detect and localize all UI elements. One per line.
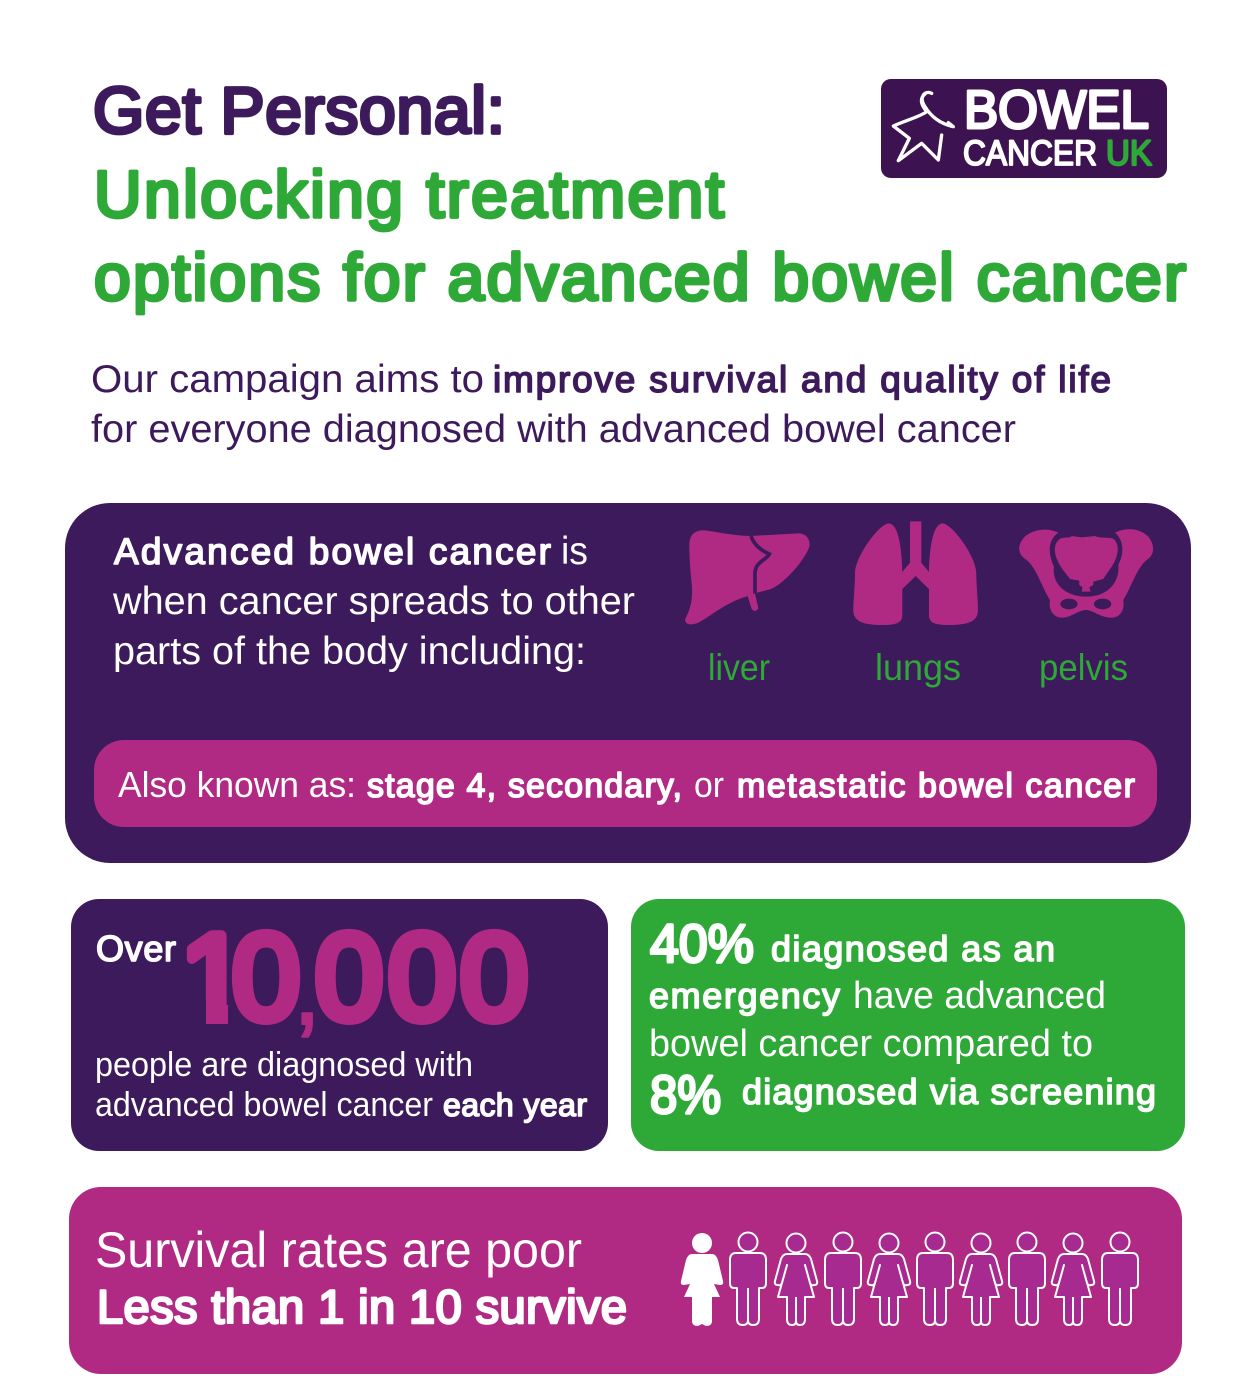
description: people are diagnosed with (95, 1046, 473, 1084)
icon: liver (685, 530, 810, 624)
icon: lungs (853, 521, 978, 625)
icon: ribbon star (893, 92, 953, 161)
intro line 2: for everyone diagnosed with advanced bowel cancer (91, 408, 1016, 451)
description: advanced bowel cancer (95, 1086, 433, 1124)
survival heading: Survival rates are poor (95, 1222, 582, 1278)
logo: Bowel Cancer UK: UK (1106, 134, 1152, 173)
icon: pelvis (1019, 529, 1153, 618)
panel: what is advanced bowel cancer (65, 503, 1191, 863)
big number: 0 (232, 909, 300, 1045)
person: woman 1 (775, 1234, 817, 1325)
logo: Bowel Cancer UK: BOWEL (964, 80, 1149, 140)
person: man 1 (730, 1232, 766, 1325)
definition text: parts of the body including: (113, 630, 586, 673)
person: man 5 (1102, 1232, 1138, 1325)
statement text: emergency (649, 975, 840, 1016)
person: man 3 (917, 1232, 953, 1325)
intro line 1 emphasis: improve survival and quality of life (493, 359, 1111, 400)
organ labels: liver (708, 647, 770, 688)
stat: 40%: 40% (650, 914, 754, 974)
title line 2: Unlocking treatment (94, 157, 724, 231)
definition text: when cancer spreads to other (112, 580, 635, 623)
description: each year (443, 1087, 587, 1123)
definition text (112, 530, 635, 673)
statement text: have advanced (853, 975, 1106, 1017)
definition text: Advanced bowel cancer (114, 531, 551, 572)
intro text (91, 358, 1111, 451)
label: over: Over (96, 928, 176, 969)
organ labels: pelvis (1039, 647, 1128, 688)
icon row: 1 in 10 people (681, 1232, 1138, 1326)
statement text: diagnosed via screening (742, 1071, 1156, 1112)
statement text: bowel cancer compared to (649, 1023, 1093, 1065)
panel: survival rates (69, 1187, 1182, 1374)
person: man 2 (825, 1232, 861, 1325)
title (93, 73, 1186, 314)
title line 1: Get Personal: (93, 73, 505, 147)
person: woman 4 (1052, 1234, 1094, 1325)
description (95, 1046, 587, 1124)
survival statistic: Less than 1 in 10 survive (97, 1280, 627, 1333)
logo: Bowel Cancer UK (881, 79, 1167, 178)
person: woman 3 (960, 1234, 1002, 1325)
callout: also known as: stage 4, secondary, (367, 767, 682, 805)
person: survivor filled (681, 1233, 723, 1326)
panel: 10,000 diagnosed (71, 899, 608, 1151)
person: woman 2 (868, 1234, 910, 1325)
big number: 0 (388, 909, 456, 1045)
callout: also known as (94, 740, 1157, 827)
definition text: is (561, 530, 588, 573)
statement text (649, 928, 1156, 1112)
statement text: diagnosed as an (771, 928, 1055, 969)
logo: Bowel Cancer UK: CANCER (963, 134, 1097, 173)
big number: 0 (315, 909, 383, 1045)
big number: 0 (460, 909, 528, 1045)
callout: also known as: metastatic bowel cancer (737, 767, 1135, 805)
person: man 4 (1009, 1232, 1045, 1325)
callout: also known as: or (694, 764, 724, 805)
title line 3: options for advanced bowel cancer (94, 240, 1186, 314)
big number: 1 (180, 909, 248, 1045)
organ labels (708, 647, 1128, 688)
panel: 40% vs 8% (631, 899, 1185, 1151)
callout: also known as: Also known as: (118, 764, 356, 805)
big number: , (293, 934, 321, 1046)
stat: 8%: 8% (650, 1065, 721, 1125)
big number (176, 909, 528, 1046)
organ labels: lungs (875, 647, 961, 688)
intro line 1: Our campaign aims to (91, 358, 484, 401)
